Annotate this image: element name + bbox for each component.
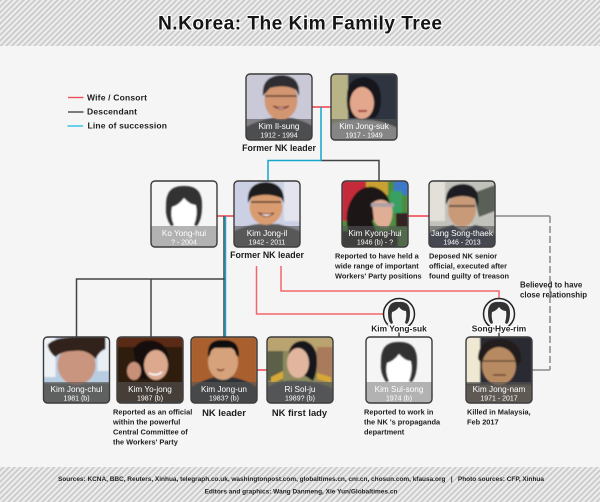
note: Kim Sul-song: department bbox=[364, 428, 405, 436]
note: Jang Song-thaek: found guilty of treason bbox=[429, 272, 510, 280]
card: Kim Jong-nam bbox=[466, 337, 532, 403]
card: Ri Sol-ju: 1989? (b) bbox=[285, 396, 315, 402]
card: Kim Jong-chul bbox=[44, 337, 110, 403]
card: Kim Kyong-hui bbox=[342, 181, 408, 247]
note: Kim Kyong-hui: wide range of important bbox=[334, 262, 419, 270]
note: close relationship: Believed to have bbox=[520, 280, 583, 290]
note: Jang Song-thaek: official, executed after bbox=[429, 262, 507, 270]
footer sources: Sources: KCNA, BBC, Reuters, Xinhua, telegraph.co.uk, washingtonpost.com, globaltimes.cn, cnr.cn, chosun.com, kfausa.org | Photo sources: CFP, Xinhua bbox=[58, 476, 544, 483]
card: Kim Kyong-hui: 1946 (b) - ? bbox=[357, 240, 393, 246]
circle: Kim Yong-suk: Kim Yong-suk bbox=[371, 324, 427, 334]
legend: descendant: Descendant bbox=[87, 106, 137, 116]
caption: NK leader: NK leader bbox=[202, 407, 246, 418]
card: Kim Il-sung: 1912 - 1994 bbox=[260, 132, 298, 140]
card: Kim Il-sung bbox=[244, 74, 316, 140]
legend: line of succession: Line of succession bbox=[88, 120, 167, 130]
card: Kim Jong-un: Kim Jong-un bbox=[201, 385, 247, 394]
relationship line bbox=[495, 216, 550, 370]
card: Kim Jong-nam: 1971 - 2017 bbox=[480, 396, 518, 402]
card: Kim Il-sung: Kim Il-sung bbox=[259, 122, 300, 131]
circle: Song Hye-rim: Song Hye-rim bbox=[472, 324, 526, 334]
card: Kim Jong-il: Kim Jong-il bbox=[247, 229, 287, 238]
legend: wife / consort: Wife / Consort bbox=[87, 92, 147, 102]
icon: female silhouette bbox=[381, 342, 417, 386]
card: Kim Jong-il: 1942 - 2011 bbox=[249, 240, 286, 246]
note: Kim Jong-nam: Killed in Malaysia, bbox=[467, 408, 531, 416]
icon: female silhouette bbox=[166, 186, 202, 230]
legend bbox=[68, 92, 167, 130]
card: Jang Song-thaek: 1946 - 2013 bbox=[443, 240, 481, 246]
connector lines bbox=[76, 107, 550, 370]
card: Kim Yo-jong bbox=[117, 337, 183, 403]
note: Kim Sul-song: the NK 's propaganda bbox=[364, 418, 441, 426]
note: Kim Yo-jong: the Workers' Party bbox=[113, 438, 179, 446]
card: Kim Sul-song: Kim Sul-song bbox=[375, 385, 424, 394]
circle: Kim Yong-suk bbox=[371, 298, 427, 334]
note: Kim Yo-jong: within the powerful bbox=[112, 418, 180, 426]
header band bbox=[0, 0, 600, 46]
card: Kim Jong-il bbox=[234, 181, 300, 247]
note: Kim Yo-jong: Central Committee of bbox=[113, 428, 188, 436]
note: Kim Kyong-hui: Workers' Party positions bbox=[335, 272, 422, 280]
card: Kim Jong-chul: Kim Jong-chul bbox=[51, 385, 103, 394]
card: Kim Jong-suk: 1917 - 1949 bbox=[345, 132, 383, 140]
card: Ko Yong-hui bbox=[151, 181, 217, 247]
card: Kim Jong-un bbox=[191, 337, 257, 403]
card: Ri Sol-ju bbox=[267, 337, 333, 403]
card: Kim Yo-jong: 1987 (b) bbox=[137, 396, 163, 402]
note: Kim Yo-jong: Reported as an official bbox=[113, 408, 192, 416]
card: Kim Jong-un: 1983? (b) bbox=[209, 396, 239, 402]
note: close relationship: close relationship bbox=[520, 290, 587, 300]
circle: Song Hye-rim bbox=[472, 298, 526, 334]
note: Jang Song-thaek: Deposed NK senior bbox=[429, 252, 497, 260]
wife lines bbox=[217, 107, 429, 370]
card: Kim Jong-suk: Kim Jong-suk bbox=[339, 122, 390, 131]
caption: former leader: Former NK leader bbox=[230, 250, 304, 260]
card: Ko Yong-hui: Ko Yong-hui bbox=[162, 229, 206, 238]
note: Kim Jong-nam: Feb 2017 bbox=[467, 418, 499, 426]
line of succession bbox=[226, 107, 321, 337]
card: Kim Jong-chul: 1981 (b) bbox=[63, 396, 90, 402]
descendant lines bbox=[76, 160, 499, 337]
caption: former leader: Former NK leader bbox=[242, 143, 316, 153]
note: Kim Kyong-hui: Reported to have held a bbox=[335, 252, 420, 260]
footer credits: Editors and graphics: Wang Danmeng, Xie Yun/Globaltimes.cn bbox=[205, 488, 397, 496]
title: N.Korea: The Kim Family Tree bbox=[158, 14, 442, 34]
card: Ri Sol-ju: Ri Sol-ju bbox=[285, 385, 316, 394]
caption: NK first lady: NK first lady bbox=[272, 407, 328, 418]
footer band bbox=[0, 467, 600, 502]
card: Jang Song-thaek: Jang Song-thaek bbox=[431, 229, 494, 238]
card: Kim Sul-song: 1974 (b) bbox=[386, 396, 412, 402]
note: Kim Sul-song: Reported to work in bbox=[364, 408, 434, 416]
card: Kim Yo-jong: Kim Yo-jong bbox=[128, 385, 172, 394]
consort lines of Kim Jong-il bbox=[256, 266, 499, 314]
card: Jang Song-thaek bbox=[429, 181, 495, 247]
card: Ko Yong-hui: ? - 2004 bbox=[171, 240, 197, 246]
card: Kim Sul-song bbox=[366, 337, 432, 403]
card: Kim Jong-suk bbox=[331, 74, 397, 140]
card: Kim Jong-nam: Kim Jong-nam bbox=[473, 385, 526, 394]
card: Kim Kyong-hui: Kim Kyong-hui bbox=[348, 229, 402, 238]
